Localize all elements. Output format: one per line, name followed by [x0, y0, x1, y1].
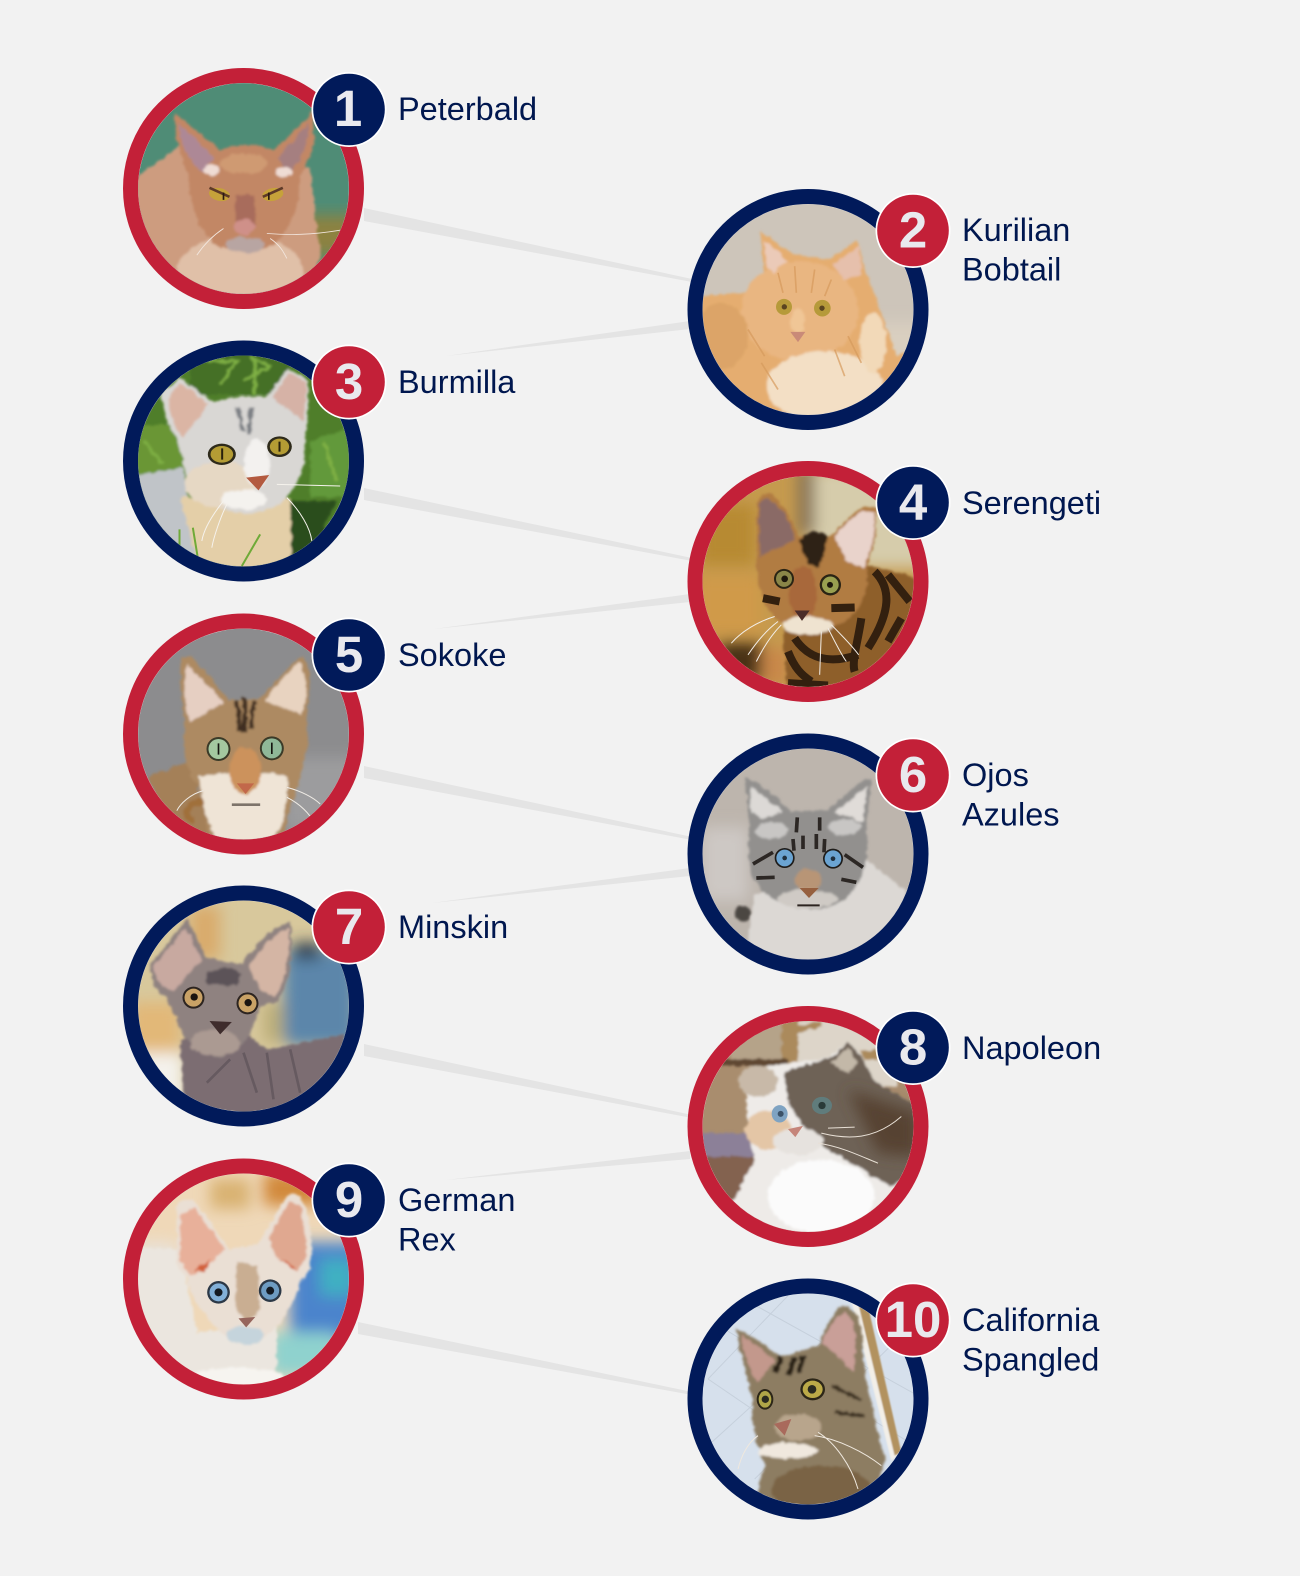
ring: [130, 621, 356, 847]
photo: Kurilian Bobtail cat: [702, 204, 914, 415]
label: California: [962, 1302, 1100, 1338]
photo: Napoleon cat: [702, 1021, 914, 1232]
number badge 10: 10: [885, 1291, 941, 1348]
number badge 9: [312, 1162, 386, 1238]
photo: Peterbald cat: [138, 83, 349, 294]
number badge 5: 5: [335, 626, 363, 683]
number badge 1: [312, 72, 386, 147]
ring: [695, 1286, 921, 1512]
label: Ojos: [962, 757, 1029, 793]
number badge 9: 9: [335, 1171, 363, 1228]
number badge 8: [876, 1010, 950, 1085]
item 10: California Spangled: [688, 1279, 1100, 1522]
label: Peterbald: [398, 91, 537, 127]
photo: California Spangled cat: [702, 1294, 914, 1504]
label line 2: Spangled: [962, 1342, 1099, 1378]
label: Napoleon: [962, 1030, 1101, 1066]
number badge 4: 4: [899, 474, 928, 530]
photo: Ojos Azules cat: [702, 748, 914, 960]
label: Serengeti: [962, 485, 1101, 521]
label: Kurilian: [962, 212, 1070, 248]
label: Burmilla: [398, 364, 516, 400]
label line 2: Rex: [398, 1222, 456, 1258]
label: Sokoke: [398, 637, 506, 673]
number badge 2: [876, 193, 950, 268]
photo: German Rex cat: [138, 1174, 349, 1384]
number badge 6: [876, 738, 950, 812]
ring: [695, 468, 921, 694]
ring: [130, 76, 356, 302]
number badge 8: 8: [899, 1018, 927, 1076]
ring: [130, 893, 356, 1119]
label: Minskin: [398, 909, 508, 945]
photo: Sokoke cat: [138, 628, 349, 840]
number badge 7: 7: [335, 898, 363, 955]
item 1: Peterbald: [124, 68, 537, 312]
label: German: [398, 1182, 515, 1218]
item 9: German Rex: [124, 1159, 515, 1402]
number badge 4: [876, 465, 950, 540]
number badge 5: [312, 618, 386, 692]
item 4: Serengeti: [688, 462, 1101, 705]
connector: 2 to 3: [446, 321, 690, 356]
number badge 3: [312, 344, 386, 420]
connector: 1 to 2: [364, 208, 692, 282]
label line 2: Bobtail: [962, 252, 1061, 288]
connector: 4 to 5: [434, 594, 690, 629]
number badge 2: 2: [899, 202, 927, 258]
number badge 6: 6: [899, 746, 927, 803]
number badge 1: 1: [334, 80, 362, 137]
photo: Burmilla cat: [138, 356, 349, 566]
ring: [695, 741, 921, 967]
connector: 3 to 4: [364, 488, 692, 561]
item 8: Napoleon: [688, 1006, 1101, 1250]
ring: [695, 196, 921, 422]
number badge 10: [876, 1282, 950, 1358]
item 2: Kurilian Bobtail: [688, 190, 1070, 436]
item 5: Sokoke: [124, 614, 506, 857]
connector: 6 to 7: [432, 868, 690, 903]
connector: 9 to 10: [358, 1322, 692, 1395]
ring: [130, 348, 356, 574]
connector: 8 to 9: [446, 1151, 690, 1180]
item 3: Burmilla: [124, 341, 516, 584]
ring: [695, 1014, 921, 1240]
item 7: Minskin: [124, 886, 508, 1129]
label line 2: Azules: [962, 796, 1060, 832]
connector: 5 to 6: [364, 766, 692, 840]
connector: 7 to 8: [364, 1044, 692, 1118]
number badge 7: [312, 890, 386, 964]
photo: Serengeti cat: [702, 476, 914, 687]
number badge 3: 3: [335, 353, 363, 410]
photo: Minskin cat: [138, 900, 349, 1112]
ring: [130, 1166, 356, 1392]
item 6: Ojos Azules: [688, 734, 1060, 977]
